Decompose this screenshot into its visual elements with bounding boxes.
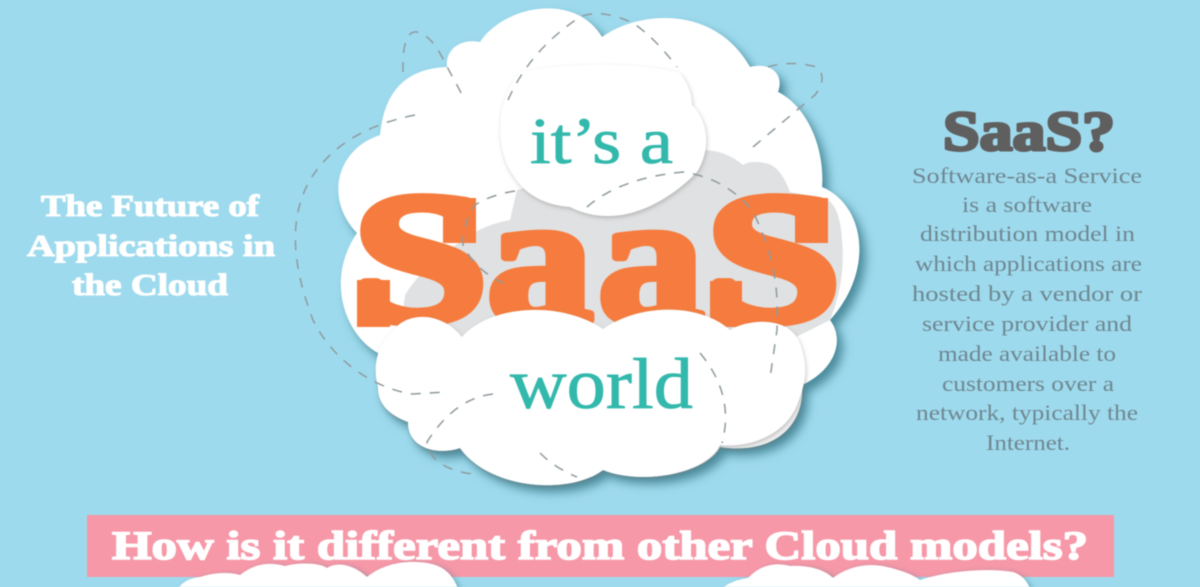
banner heading: How is it different from other Cloud models? — [112, 523, 1088, 568]
definition text: hosted by a vendor or — [912, 281, 1143, 306]
dashed orbit lines — [295, 14, 822, 477]
bottom cloud — [376, 310, 805, 485]
definition text: network, typically the — [916, 400, 1138, 425]
definition text: Software-as-a Service — [912, 163, 1142, 188]
wordmark: SaaS: S — [353, 156, 487, 360]
lower right cloud lobe — [700, 380, 802, 448]
tagline: The Future of — [41, 188, 260, 223]
definition text: service provider and — [922, 311, 1132, 336]
tagline — [27, 188, 275, 302]
bottom clouds — [172, 562, 1034, 587]
wordmark: SaaS: a — [487, 156, 593, 360]
definition text: Internet. — [986, 430, 1070, 455]
wordmark: SaaS — [353, 156, 840, 360]
tagline: Applications in — [27, 228, 275, 263]
heading: SaaS?: SaaS? — [943, 101, 1115, 163]
definition text: distribution model in — [920, 221, 1135, 246]
banner — [87, 515, 1114, 577]
top cloud — [500, 65, 706, 216]
tagline: the Cloud — [72, 267, 228, 302]
definition text: which applications are — [915, 251, 1142, 276]
definition text: customers over a — [942, 371, 1114, 396]
back cloud — [338, 8, 859, 485]
definition text: made available to — [938, 341, 1116, 366]
wordmark: SaaS: S — [706, 156, 840, 360]
illustration: cloud with SaaS wordmark — [295, 8, 859, 485]
definition text: is a software — [962, 192, 1092, 217]
text: world: world — [510, 344, 693, 424]
wordmark: SaaS: a — [598, 156, 704, 360]
grey inner cloud — [400, 150, 843, 345]
definition text — [912, 163, 1143, 455]
text: it's a: it’s a — [530, 105, 673, 178]
